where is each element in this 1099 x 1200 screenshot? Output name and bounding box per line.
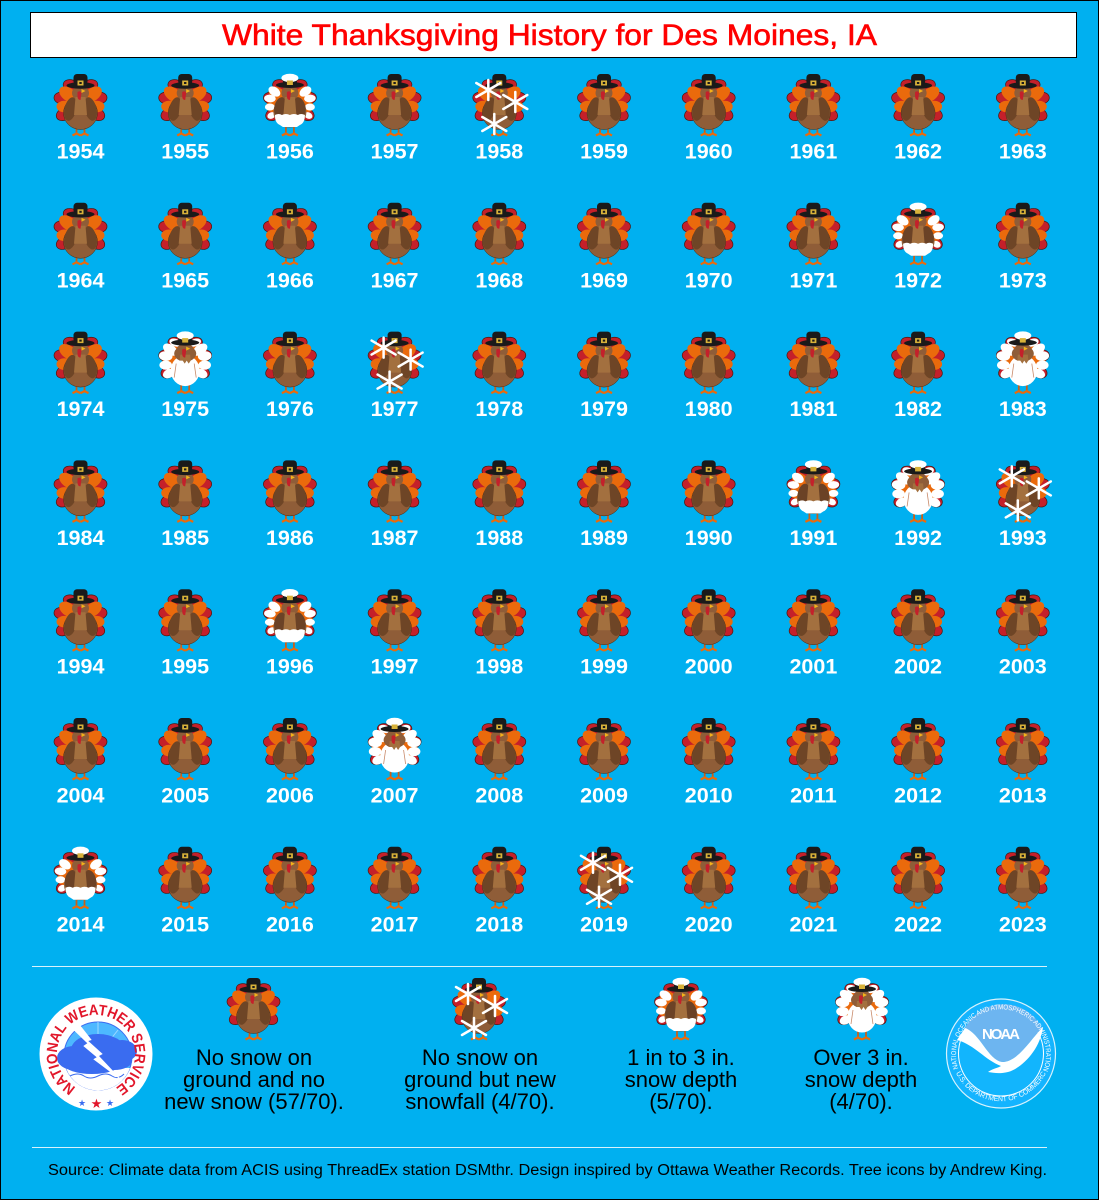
1999 <box>577 589 631 679</box>
1966 <box>263 203 317 292</box>
1962 <box>891 74 945 164</box>
1976: 1976 <box>266 397 314 421</box>
1967 <box>368 203 422 292</box>
1991 <box>786 460 840 550</box>
legend: 1 to 3 inches: 1 in to 3 in. <box>627 1045 735 1070</box>
icon: NWS logo: NATIONAL WEATHER SERVICE <box>46 1004 146 1096</box>
1956 <box>263 74 317 164</box>
1997 <box>368 589 422 679</box>
turkey grid by year <box>54 74 1051 936</box>
2002: 2002 <box>894 655 942 679</box>
1996: 1996 <box>266 655 314 679</box>
1990 <box>682 460 736 550</box>
2019: 2019 <box>580 912 628 936</box>
1963: 1963 <box>999 140 1047 164</box>
legend: over 3 inches: snow depth <box>805 1067 917 1092</box>
1964: 1964 <box>57 268 104 292</box>
1996 <box>263 589 317 679</box>
2021: 2021 <box>789 912 837 936</box>
1966: 1966 <box>266 268 314 292</box>
1968: 1968 <box>475 268 523 292</box>
1995 <box>158 589 212 679</box>
1980: 1980 <box>685 397 733 421</box>
1974 <box>54 332 107 421</box>
1970: 1970 <box>685 268 733 292</box>
1993 <box>996 460 1051 550</box>
1969 <box>577 203 631 292</box>
legend: new snowfall: No snow on <box>422 1045 538 1070</box>
1997: 1997 <box>371 655 419 679</box>
2007: 2007 <box>371 784 419 808</box>
1958: 1958 <box>475 140 523 164</box>
1971 <box>786 203 840 292</box>
1974: 1974 <box>57 397 104 421</box>
2010 <box>682 718 736 808</box>
1999: 1999 <box>580 655 628 679</box>
2011 <box>786 718 840 808</box>
1998 <box>472 589 526 679</box>
2021 <box>786 847 840 936</box>
1957: 1957 <box>371 140 419 164</box>
2003: 2003 <box>999 655 1047 679</box>
2014 <box>54 847 107 936</box>
1956: 1956 <box>266 140 314 164</box>
1955: 1955 <box>161 140 209 164</box>
2016 <box>263 847 317 936</box>
2015 <box>158 847 212 936</box>
1993: 1993 <box>999 526 1047 550</box>
1957 <box>368 74 422 164</box>
1965: 1965 <box>161 268 209 292</box>
1955 <box>158 74 212 164</box>
legend: new snowfall <box>404 978 556 1114</box>
1984: 1984 <box>57 526 104 550</box>
legend: no snow: new snow (57/70). <box>164 1089 344 1114</box>
icon: NOAA logo: NATIONAL OCEANIC AND ATMOSPHERIC ADMINISTRATION <box>951 1004 1051 1072</box>
2009: 2009 <box>580 784 628 808</box>
1981: 1981 <box>789 397 837 421</box>
2000 <box>682 589 736 679</box>
title <box>30 12 1076 58</box>
1961 <box>786 74 840 164</box>
1982: 1982 <box>894 397 942 421</box>
icon: NWS logo: ★ <box>78 1098 86 1108</box>
2016: 2016 <box>266 912 314 936</box>
legend: over 3 inches: (4/70). <box>829 1089 893 1114</box>
1998: 1998 <box>475 655 523 679</box>
2004 <box>54 718 107 808</box>
2010: 2010 <box>685 784 733 808</box>
2023: 2023 <box>999 912 1047 936</box>
legend: new snowfall: snowfall (4/70). <box>405 1089 555 1114</box>
2023 <box>996 847 1050 936</box>
legend: no snow: No snow on <box>196 1045 312 1070</box>
2012 <box>891 718 945 808</box>
1982 <box>891 332 945 421</box>
2008: 2008 <box>475 784 523 808</box>
legend: 1 to 3 inches: snow depth <box>625 1067 737 1092</box>
2005: 2005 <box>161 784 209 808</box>
1977 <box>368 332 423 421</box>
1972: 1972 <box>894 268 942 292</box>
1994: 1994 <box>57 655 104 679</box>
1985: 1985 <box>161 526 209 550</box>
legend: 1 to 3 inches: (5/70). <box>649 1089 713 1114</box>
1970 <box>682 203 736 292</box>
1988: 1988 <box>475 526 523 550</box>
1987 <box>368 460 422 550</box>
2007 <box>368 718 422 808</box>
1959 <box>577 74 631 164</box>
legend: new snowfall: ground but new <box>404 1067 556 1092</box>
1972 <box>891 203 945 292</box>
1986: 1986 <box>266 526 314 550</box>
1978 <box>472 332 526 421</box>
1987: 1987 <box>371 526 419 550</box>
1967: 1967 <box>371 268 419 292</box>
title: White Thanksgiving History for Des Moines, IA <box>222 19 877 52</box>
1968 <box>472 203 526 292</box>
source note: Source: Climate data from ACIS using ThreadEx station DSMthr. Design inspired by Ottawa Weather Records. Tree icons by Andrew King. <box>48 1162 1047 1179</box>
1983 <box>996 331 1050 421</box>
2012: 2012 <box>894 784 942 808</box>
icon: NWS logo: ★ <box>91 1096 102 1111</box>
1960 <box>682 74 736 164</box>
2006: 2006 <box>266 784 314 808</box>
legend: over 3 inches: Over 3 in. <box>813 1045 909 1070</box>
1979: 1979 <box>580 397 628 421</box>
1992 <box>891 460 945 550</box>
1975: 1975 <box>161 397 209 421</box>
2017 <box>368 847 422 936</box>
1954: 1954 <box>57 140 104 164</box>
1973: 1973 <box>999 268 1047 292</box>
1962: 1962 <box>894 140 942 164</box>
icon: NOAA logo: U.S. DEPARTMENT OF COMMERCE <box>956 1071 1046 1102</box>
1976 <box>263 332 317 421</box>
2013 <box>996 718 1050 808</box>
1983: 1983 <box>999 397 1047 421</box>
legend: 1 to 3 inches <box>625 978 737 1114</box>
2002 <box>891 589 945 679</box>
1973 <box>996 203 1050 292</box>
1985 <box>158 460 212 550</box>
icon: NWS logo: ★ <box>106 1098 114 1108</box>
1960: 1960 <box>685 140 733 164</box>
1992: 1992 <box>894 526 942 550</box>
1990: 1990 <box>685 526 733 550</box>
2003 <box>996 589 1050 679</box>
icon: NOAA logo: NOAA <box>982 1026 1020 1043</box>
2009 <box>577 718 631 808</box>
1989: 1989 <box>580 526 628 550</box>
1963 <box>996 74 1050 164</box>
1959: 1959 <box>580 140 628 164</box>
2015: 2015 <box>161 912 209 936</box>
2005 <box>158 718 212 808</box>
1978: 1978 <box>475 397 523 421</box>
2001 <box>786 589 840 679</box>
2020: 2020 <box>685 912 733 936</box>
2000: 2000 <box>685 655 733 679</box>
1991: 1991 <box>789 526 837 550</box>
2014: 2014 <box>57 912 104 936</box>
1989 <box>577 460 631 550</box>
1980 <box>682 332 736 421</box>
1969: 1969 <box>580 268 628 292</box>
1971: 1971 <box>789 268 837 292</box>
2004: 2004 <box>57 784 104 808</box>
legend: no snow <box>164 978 344 1114</box>
2008 <box>472 718 526 808</box>
2018: 2018 <box>475 912 523 936</box>
1981 <box>786 332 840 421</box>
legend <box>164 978 917 1114</box>
1988 <box>472 460 526 550</box>
2022 <box>891 847 945 936</box>
1979 <box>577 332 631 421</box>
1994 <box>54 589 107 679</box>
2018 <box>472 847 526 936</box>
1975 <box>158 331 212 421</box>
2011: 2011 <box>790 784 837 808</box>
1954 <box>54 74 107 164</box>
2013: 2013 <box>999 784 1047 808</box>
1977: 1977 <box>371 397 419 421</box>
2022: 2022 <box>894 912 942 936</box>
1995: 1995 <box>161 655 209 679</box>
1961: 1961 <box>789 140 837 164</box>
1965 <box>158 203 212 292</box>
1958 <box>472 74 527 164</box>
legend: no snow: ground and no <box>183 1067 325 1092</box>
1984 <box>54 460 107 550</box>
2001: 2001 <box>789 655 837 679</box>
1986 <box>263 460 317 550</box>
2019 <box>577 847 632 936</box>
legend: over 3 inches <box>805 978 917 1114</box>
1964 <box>54 203 107 292</box>
2020 <box>682 847 736 936</box>
2017: 2017 <box>371 912 419 936</box>
2006 <box>263 718 317 808</box>
